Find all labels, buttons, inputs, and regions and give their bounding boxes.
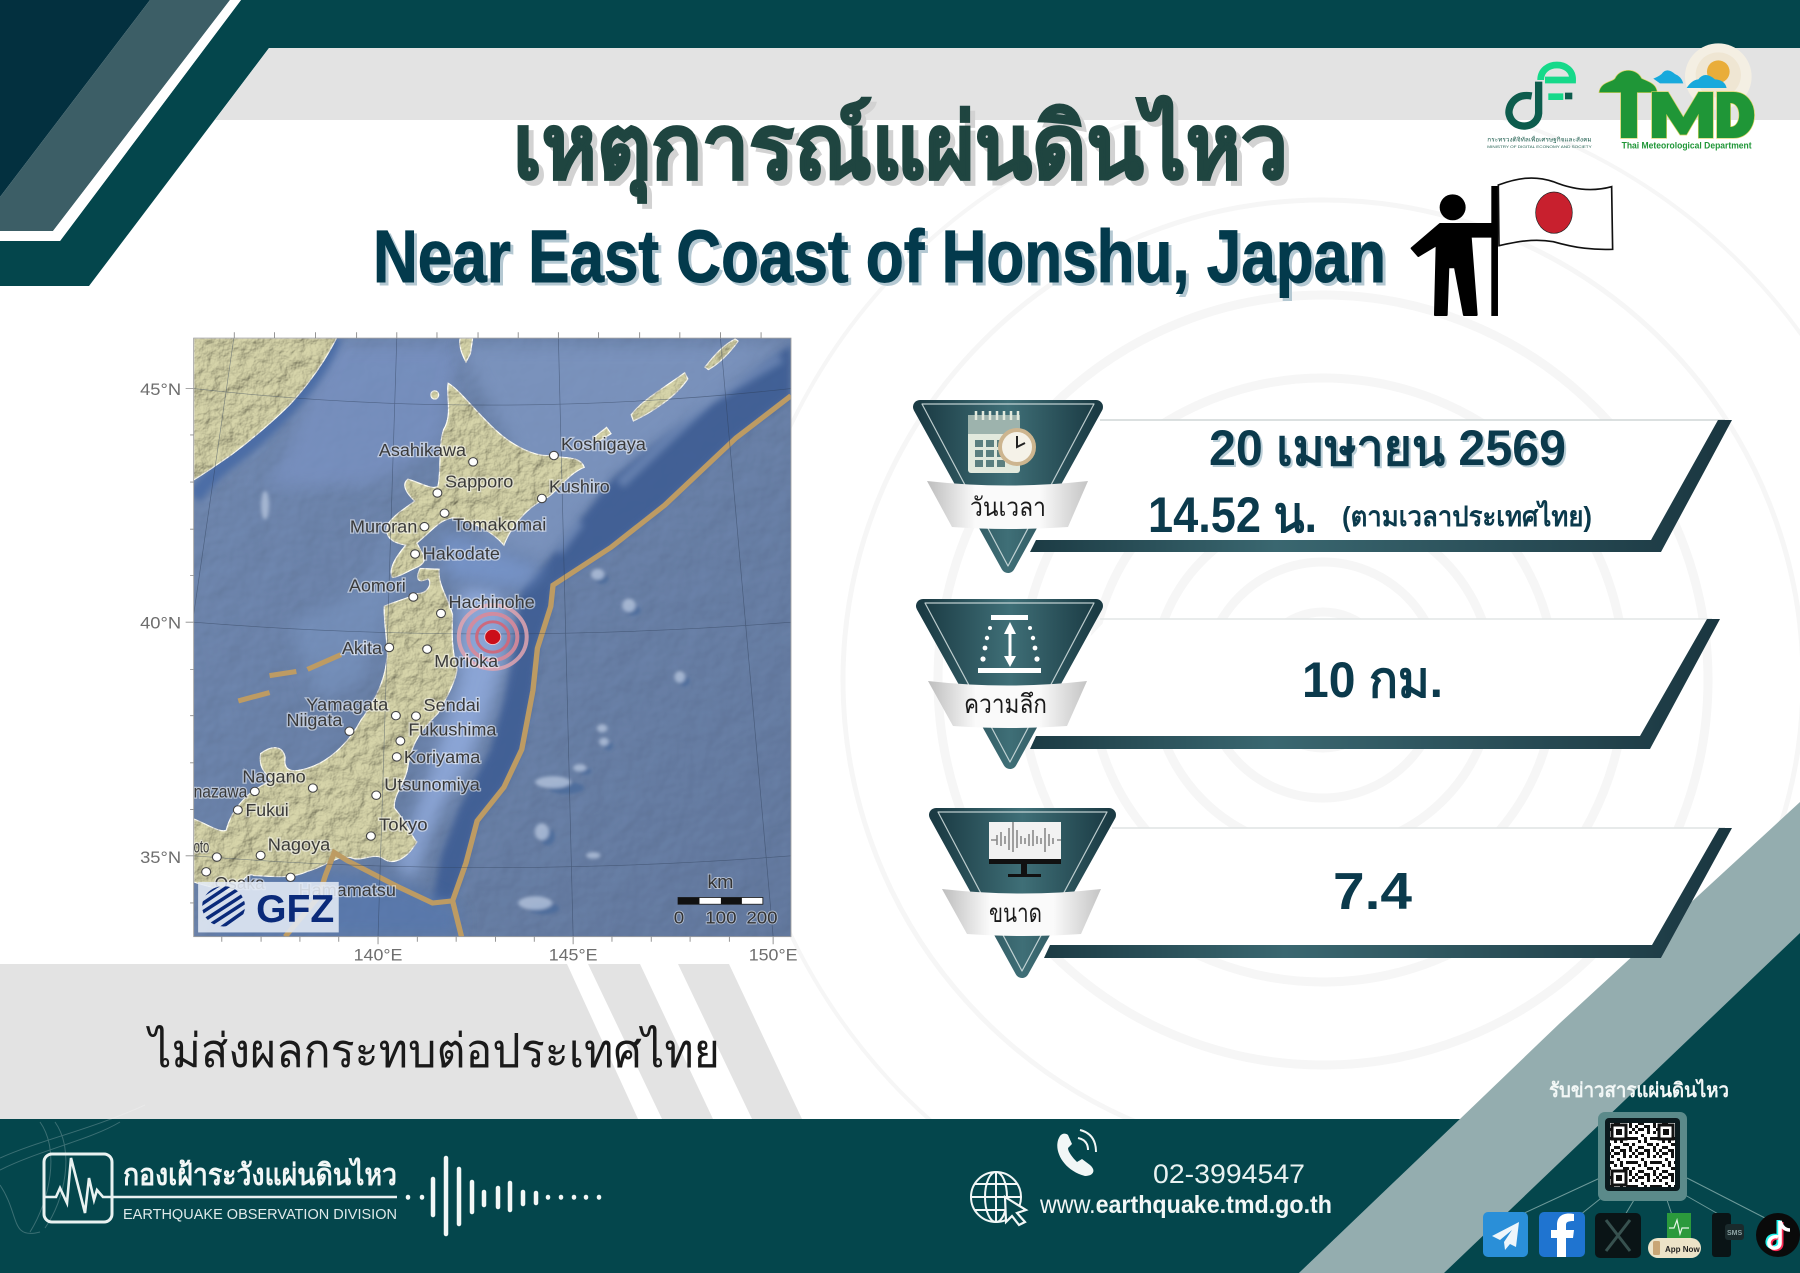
icon: SMS phone <box>1712 1213 1744 1257</box>
icon: X <box>1595 1213 1641 1258</box>
map: ocean: Sendai <box>424 696 480 715</box>
footer: decorative wave lines <box>0 1105 145 1234</box>
map: axis labels: 150°E <box>749 945 798 965</box>
icon: facebook <box>1539 1212 1585 1257</box>
map: ocean: Sapporo <box>445 472 513 491</box>
icon: earthquake app <box>1648 1213 1701 1258</box>
map: scale bar: km <box>707 873 734 893</box>
icon: earthquake app: App Now <box>1665 1245 1700 1254</box>
badge triangle <box>923 606 1096 762</box>
map: ocean: Nagano <box>242 767 306 786</box>
panel body <box>1030 420 1732 552</box>
time zone note: (ตามเวลาประเทศไทย) <box>1342 500 1592 532</box>
map: ocean: Hamamatsu <box>299 880 396 900</box>
map: GFZ logo: GFZ <box>256 888 334 931</box>
map: ocean: Kushiro <box>549 477 610 496</box>
logo: Thai Meteorological Department: Thai Meteorological Department <box>1622 141 1752 151</box>
map: city markers and labels <box>202 451 558 882</box>
panel: depth <box>923 603 1720 762</box>
magnitude value: 7.4 <box>1333 863 1412 921</box>
icon: telegram <box>1483 1212 1528 1257</box>
ribbon label: ขนาด <box>989 898 1042 928</box>
icon: seismograph monitor <box>989 822 1061 877</box>
website: www.earthquake.tmd.go.th <box>1039 1191 1332 1219</box>
icon: phone <box>1057 1130 1096 1176</box>
impact statement: ไม่ส่งผลกระทบต่อประเทศไทย <box>145 1024 720 1077</box>
icon: globe with cursor <box>971 1172 1026 1225</box>
map: ocean: nazawa <box>194 782 247 802</box>
map: ocean: Osaka <box>215 874 265 893</box>
icon: tiktok <box>1756 1213 1800 1257</box>
panel body <box>1030 619 1720 749</box>
top header shapes <box>0 0 1800 286</box>
icon: calendar with clock <box>968 411 1034 473</box>
badge triangle <box>936 815 1109 971</box>
date value: 20 เมษายน 2569 <box>1209 420 1566 476</box>
map: ocean: Aomori <box>349 576 406 595</box>
QR code <box>1598 1112 1687 1201</box>
title: Thai heading: เหตุการณ์แผ่นดินไหว <box>513 96 1288 204</box>
panel: date and time <box>920 404 1732 566</box>
logo: ministry of digital economy and society: MINISTRY OF DIGITAL ECONOMY AND SOCIETY <box>1487 144 1592 149</box>
connector lines <box>1520 1178 1765 1218</box>
map: scale bar: 200 <box>746 908 778 927</box>
footer: waveform <box>408 1158 599 1234</box>
diagonal footer backdrop <box>0 802 1800 1273</box>
footer: division logo: กองเฝ้าระวังแผ่นดินไหว <box>123 1157 397 1192</box>
footer: division logo <box>44 1154 397 1223</box>
background seismic rings <box>733 90 1800 1270</box>
map: ocean: Asahikawa <box>379 440 466 460</box>
map: epicentre marker <box>459 605 527 669</box>
panel border bar <box>1030 420 1732 552</box>
map: ocean: Muroran <box>350 517 417 536</box>
phone number: 02-3994547 <box>1153 1159 1305 1189</box>
map: land masses <box>194 338 738 892</box>
panel border bar <box>1030 619 1720 749</box>
ribbon label <box>928 681 1087 728</box>
footer: division logo: EARTHQUAKE OBSERVATION DIVISION <box>123 1206 397 1223</box>
logo: Thai Meteorological Department <box>1599 43 1755 151</box>
map: ocean: Koriyama <box>404 748 480 767</box>
icon: SMS phone: SMS <box>1727 1230 1742 1237</box>
icon: depth arrow <box>978 615 1041 673</box>
map: ocean: Hachinohe <box>449 592 535 612</box>
ribbon label: ความลึก <box>964 689 1047 719</box>
map: graticule <box>194 338 791 937</box>
ribbon label <box>942 889 1101 936</box>
panel body <box>1044 828 1732 958</box>
map: axis labels: 35°N <box>140 847 181 867</box>
map: plate boundaries <box>238 396 791 937</box>
subtitle: location: Near East Coast of Honshu, Japan <box>373 215 1386 298</box>
panel border bar <box>1044 828 1732 958</box>
map: ocean: Yamagata <box>306 695 388 714</box>
bottom grey band with stripes <box>0 964 802 1119</box>
logo: ministry of digital economy and society: กระทรวงดิจิทัลเพื่อเศรษฐกิจและสังคม <box>1487 136 1592 144</box>
map: ocean: Utsunomiya <box>384 775 480 794</box>
map: GFZ logo <box>198 882 339 932</box>
map: ocean: Fukushima <box>408 720 496 739</box>
ribbon label <box>927 481 1088 529</box>
logo: ministry of digital economy and society <box>1487 65 1592 149</box>
map: frame and ticks <box>186 332 791 944</box>
map: ocean: Tokyo <box>379 815 428 834</box>
panel: magnitude <box>936 812 1732 971</box>
map: axis labels: 45°N <box>140 379 181 399</box>
map: axis labels: 140°E <box>354 945 402 965</box>
map: ocean: Akita <box>342 638 382 658</box>
map: ocean: oto <box>194 837 209 856</box>
map: axis labels: 145°E <box>549 945 598 965</box>
map: ocean: Nagoya <box>268 835 330 854</box>
news heading: รับข่าวสารแผ่นดินไหว <box>1549 1078 1729 1102</box>
earthquake location map <box>140 332 798 965</box>
map: ocean: Fukui <box>245 800 289 820</box>
depth value: 10 กม. <box>1302 652 1443 708</box>
map: ocean <box>194 337 791 937</box>
map: ocean: Tomakomai <box>453 515 546 534</box>
time value: 14.52 น. <box>1148 487 1317 543</box>
map: scale bar: 0 <box>674 908 684 927</box>
icon: person holding Japan flag <box>1412 178 1613 316</box>
badge triangle <box>920 407 1096 566</box>
map: axis labels: 40°N <box>140 613 181 632</box>
map: ocean: Hakodate <box>423 544 500 563</box>
map: scale bar: 100 <box>705 908 737 927</box>
map: scale bar <box>674 873 778 927</box>
map: axis labels <box>140 379 798 965</box>
map: ocean: Morioka <box>434 651 498 671</box>
map: ocean: Niigata <box>287 711 342 730</box>
map: ocean: Koshigaya <box>561 435 646 454</box>
ribbon label: วันเวลา <box>970 492 1046 522</box>
